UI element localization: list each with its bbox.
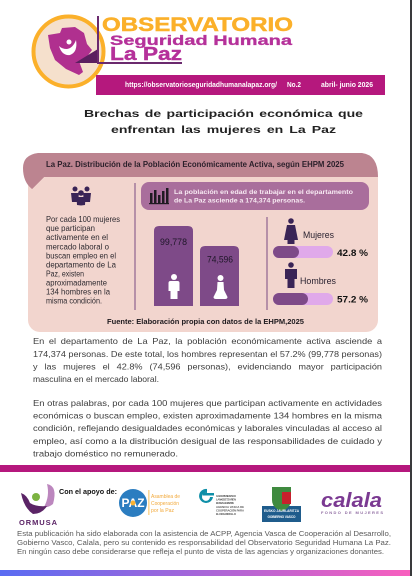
callout: working-age population: de La Paz asciende a 174,374 personas. xyxy=(174,198,305,204)
text block: paragraph one: 174,374 personas. De este total, los hombres representan el 57.2% (99,778 personas) xyxy=(33,349,382,359)
source note: Fuente: Elaboración propia con datos de la EHPM,2025 xyxy=(107,319,304,326)
text block: per 100 women: activamente en el xyxy=(46,233,108,242)
panel header xyxy=(23,153,378,189)
logo title text: OBSERVATORIO xyxy=(102,14,293,36)
logo: Asamblea de Cooperación por la Paz xyxy=(119,489,180,517)
text block: per 100 women xyxy=(46,215,120,306)
logo: Asamblea de Cooperación por la Paz: PAZ xyxy=(122,496,144,510)
logo: Ormusa: ORMUSA xyxy=(19,518,58,527)
stat: men 57.2%: Hombres xyxy=(300,276,336,286)
text block: per 100 women: buscan empleo en el xyxy=(46,252,116,260)
text block: per 100 women: que participan xyxy=(46,224,95,233)
logo: Gobierno Vasco xyxy=(262,487,301,522)
text block: paragraph one: y las mujeres el 42.8% (74,596 personas), evidenciando mayor participación xyxy=(33,362,382,372)
icon: group of people xyxy=(71,186,91,206)
text block: per 100 women: 134 hombres en la xyxy=(46,288,111,296)
logo title text: Seguridad Humana xyxy=(110,32,292,48)
bar: women 74,596: 74,596 xyxy=(207,254,233,264)
logo title text xyxy=(102,14,293,64)
banner: website, issue and date xyxy=(96,75,385,95)
text block: per 100 women: mercado laboral o xyxy=(46,242,110,252)
callout: working-age population xyxy=(141,182,369,210)
logo title text: La Paz xyxy=(110,43,182,64)
text block: per 100 women: departamento de La xyxy=(46,260,117,270)
text block: paragraph one: masculina en el mercado laboral. xyxy=(33,374,159,384)
text block: paragraph two: En otras palabras, por cada 100 mujeres que participan activamente en actividades xyxy=(33,398,382,408)
logo: Calala: FONDO DE MUJERES xyxy=(321,510,383,515)
banner: website, issue and date: abril- junio 2026 xyxy=(321,80,373,89)
disclaimer text: En ningún caso debe considerarse que refleja el punto de vista de las agencias y organizaciones donantes. xyxy=(17,549,384,556)
text block: per 100 women: aproximadamente xyxy=(46,278,108,288)
disclaimer text: Esta publicación ha sido elaborada con la asistencia de ACPP, Agencia Vasca de Cooperación al Desarrollo, xyxy=(17,531,391,538)
title xyxy=(84,109,364,136)
logo: Agencia Vasca de Cooperación: EL DESARROLLO xyxy=(216,512,237,516)
logo: Calala: calala xyxy=(321,490,382,512)
callout: working-age population: La población en edad de trabajar en el departamento xyxy=(174,189,353,196)
logo: Ormusa xyxy=(19,484,58,527)
text block: per 100 women: misma condición. xyxy=(46,296,102,306)
icon: man xyxy=(285,262,297,288)
text block: paragraph two: empleo, así como a la distribución desigual de las responsabilidades de cuidado y xyxy=(33,436,383,446)
logo: Gobierno Vasco: EUSKO JAURLARITZA xyxy=(264,509,300,513)
bar chart: population by sex xyxy=(154,226,239,306)
stat: women 42.8% xyxy=(273,218,368,258)
logo: Agencia Vasca de Cooperación: COOPERACIÓN PARA xyxy=(216,508,244,512)
stat: women 42.8%: 42.8 % xyxy=(337,248,368,258)
text block: paragraph two: condición, reflejando desigualdades económicas y laborales vinculadas al acceso al xyxy=(33,423,382,433)
text block: paragraph one: En el departamento de La Paz, la población económicamente activa asciende a xyxy=(33,336,382,346)
logo: Agencia Vasca de Cooperación: LANKIDETZAREN xyxy=(216,498,236,502)
text block: per 100 women: Paz, existen xyxy=(46,270,84,278)
logo: Observatorio Seguridad Humana La Paz xyxy=(34,14,293,86)
panel: economically active population xyxy=(23,153,378,332)
title: Brechas de participación económica que xyxy=(84,109,364,120)
text block: per 100 women: Por cada 100 mujeres xyxy=(46,215,120,224)
logo: Agencia Vasca de Cooperación: AGENCIA VASCA DE xyxy=(216,505,244,509)
disclaimer text xyxy=(17,531,391,556)
text block: paragraph two: económicas o buscan empleo, existen aproximadamente 134 hombres en la misma xyxy=(33,410,382,420)
logo: Agencia Vasca de Cooperación: GARAPENERAKO xyxy=(216,494,237,498)
logo: Agencia Vasca de Cooperación: EUSKAL AGENTZIA xyxy=(216,501,234,505)
logo: Agencia Vasca de Cooperación xyxy=(199,489,244,516)
supporter label: Con el apoyo de: xyxy=(59,489,117,496)
stat: women 42.8%: Mujeres xyxy=(303,230,334,240)
stat: men 57.2%: 57.2 % xyxy=(337,294,368,304)
panel header: La Paz. Distribución de la Población Económicamente Activa, según EHPM 2025 xyxy=(46,160,345,169)
stat: men 57.2% xyxy=(273,262,368,305)
bar: men 99,778: 99,778 xyxy=(160,237,187,247)
title: enfrentan las mujeres en La Paz xyxy=(111,125,336,136)
logo: Asamblea de Cooperación por la Paz: Cooperación xyxy=(151,501,179,507)
banner: website, issue and date: No.2 xyxy=(287,80,301,89)
text block: paragraph two xyxy=(33,398,383,458)
icon: La Paz map in circle xyxy=(34,16,182,86)
banner: website, issue and date: https://observatorioseguridadhumanalapaz.org/ xyxy=(125,80,278,89)
logo: Gobierno Vasco: GOBIERNO VASCO xyxy=(268,515,296,519)
text block: paragraph two: trabajo doméstico no remunerado. xyxy=(33,448,178,458)
disclaimer text: Gobierno Vasco, Calala, pero su contenido es responsabilidad del Observatorio Seguridad Humana La Paz. xyxy=(17,540,391,547)
logo: Asamblea de Cooperación por la Paz: por la Paz xyxy=(151,508,174,514)
icon: woman xyxy=(284,218,298,244)
text block: paragraph one xyxy=(33,336,382,384)
icon: bar chart xyxy=(149,188,169,204)
logo: Asamblea de Cooperación por la Paz: Asamblea de xyxy=(151,494,180,500)
